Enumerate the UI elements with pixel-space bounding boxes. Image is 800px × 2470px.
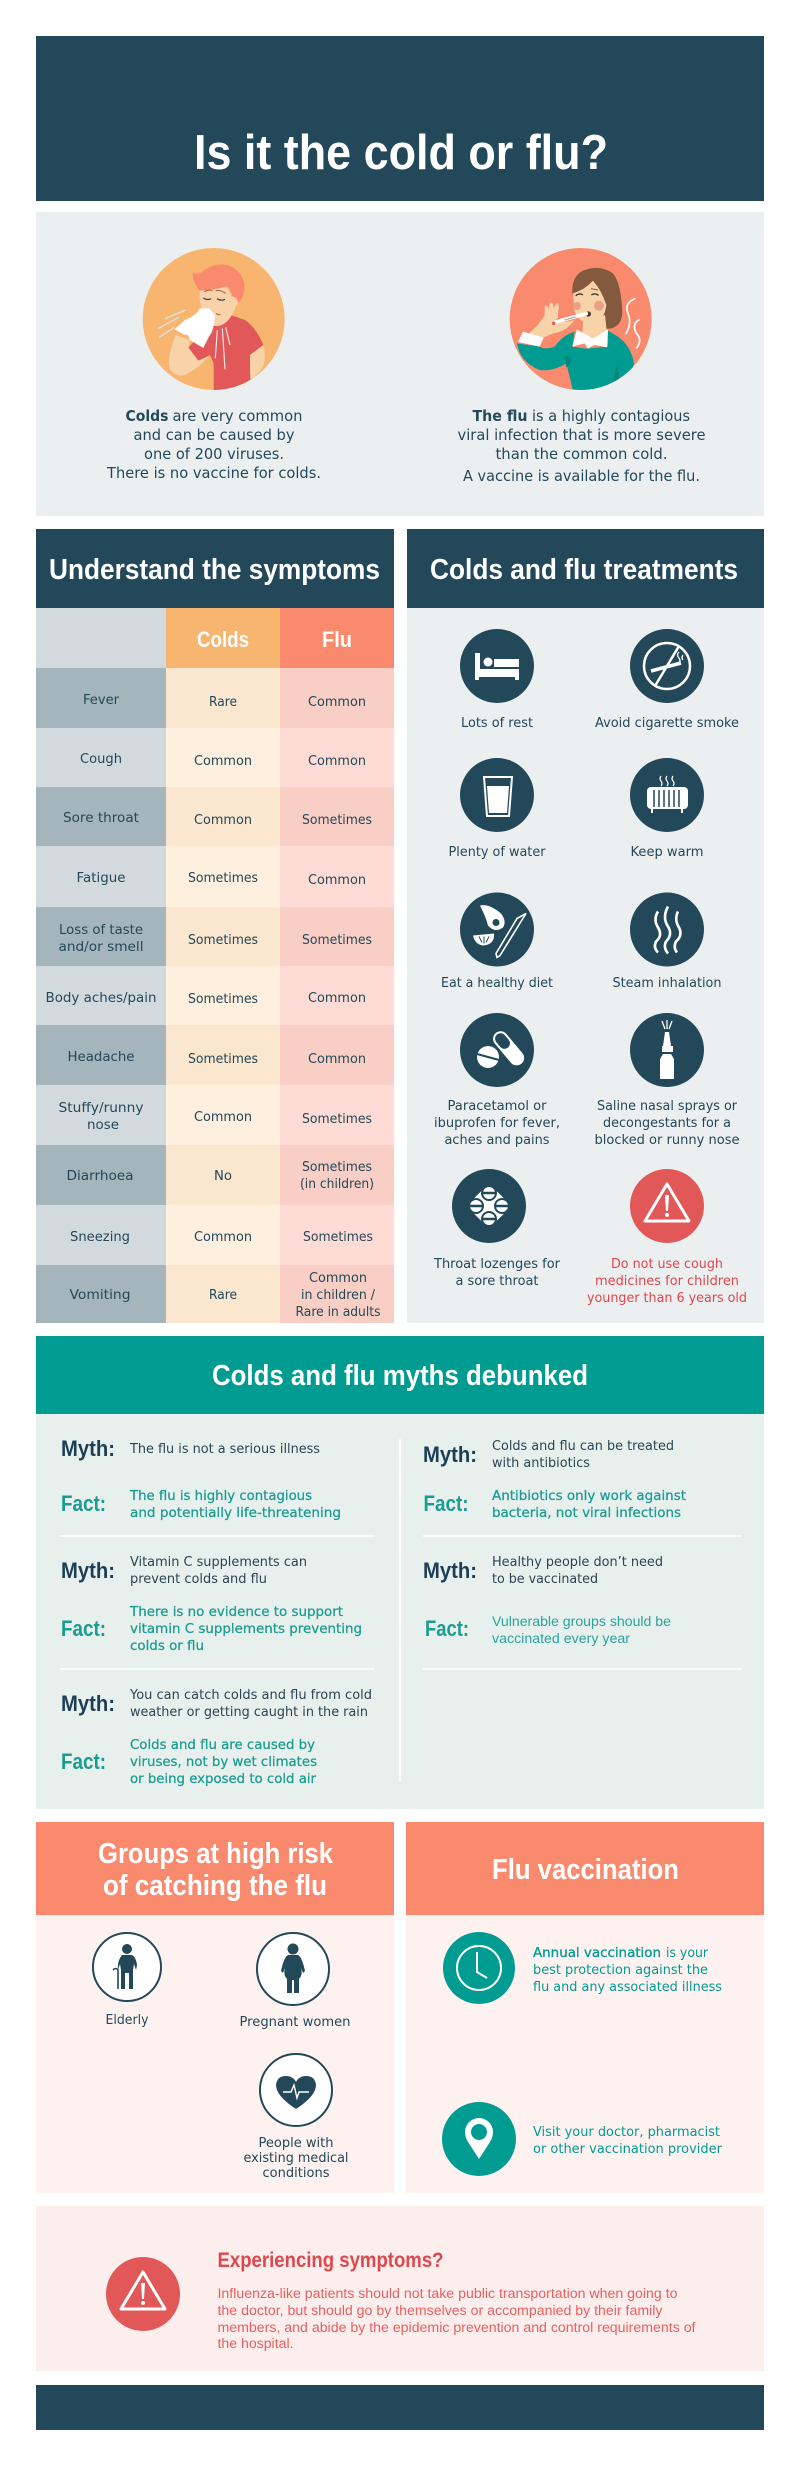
text: flu description: The flu [472, 407, 528, 425]
illustration: man sneezing [143, 248, 285, 391]
table row labels: Fever [83, 693, 120, 708]
title banner [36, 36, 764, 201]
myth 1: Myth: [61, 1436, 115, 1461]
heading: myths debunked: Colds and flu myths debunked [212, 1360, 588, 1392]
flu column values: Rare in adults [296, 1305, 381, 1320]
myth 4: Fact: [424, 1491, 468, 1516]
panel: high risk groups [36, 1822, 394, 2193]
flu column values: Common [308, 754, 366, 769]
text: annual vaccination: flu and any associated illness [533, 1980, 722, 1995]
warning text: cough medicines: medicines for children [595, 1274, 739, 1289]
icon: nasal spray [630, 1013, 704, 1087]
myth 5: Vulnerable groups should be [492, 1613, 671, 1629]
table row labels: Sneezing [70, 1230, 130, 1245]
callout heading: Experiencing symptoms? [218, 2249, 444, 2272]
icon: clock [443, 1932, 515, 2004]
flu column values: in children / [301, 1288, 376, 1303]
heading: colds and flu treatments: Colds and flu treatments [430, 554, 738, 586]
label: paracetamol or ibuprofen [434, 1099, 560, 1148]
myth 2: Vitamin C supplements can [130, 1555, 307, 1570]
table header row [36, 608, 394, 668]
myth 5: Healthy people don’t need [492, 1555, 663, 1570]
myth 3: weather or getting caught in the rain [130, 1705, 368, 1720]
title: Is it the cold or flu? [194, 126, 608, 180]
colds column values: Common [194, 754, 252, 769]
text: flu description: is a highly contagious [532, 407, 690, 425]
flu column values [296, 695, 381, 1320]
label: saline nasal sprays: decongestants for a [603, 1116, 731, 1131]
table header row: Flu [322, 627, 352, 652]
text: flu description: A vaccine is available for the flu. [463, 467, 700, 485]
label: throat lozenges [433, 1257, 561, 1289]
text: colds description: one of 200 viruses. [144, 445, 284, 463]
warning text: cough medicines: younger than 6 years old [587, 1291, 747, 1306]
label: existing medical conditions: conditions [262, 2166, 330, 2181]
text: visit your doctor [533, 2125, 723, 2157]
flu column values: Common [308, 695, 366, 710]
heading: flu vaccination: Flu vaccination [492, 1854, 679, 1886]
colds column values: Common [194, 1110, 252, 1125]
flu column values: Sometimes [302, 933, 372, 948]
label: paracetamol or ibuprofen: aches and pains [444, 1133, 550, 1148]
myth 5 [423, 1555, 671, 1646]
colds column values: Sometimes [188, 871, 258, 886]
myth 1: and potentially life-threatening [130, 1506, 341, 1521]
callout body text: the hospital. [218, 2336, 294, 2351]
heading: colds and flu treatments [407, 529, 764, 608]
panel: experiencing symptoms callout [36, 2206, 764, 2371]
label: elderly: Elderly [106, 2013, 149, 2028]
table row labels: Loss of taste [59, 923, 143, 938]
icon: throat lozenges [452, 1169, 526, 1243]
colds column values: Rare [209, 695, 237, 710]
table row labels: nose [87, 1118, 119, 1133]
label: paracetamol or ibuprofen: Paracetamol or [448, 1099, 547, 1114]
callout body text [218, 2286, 696, 2351]
colds column values: No [214, 1169, 232, 1184]
heading: myths debunked [36, 1336, 764, 1414]
table row labels: Fatigue [76, 871, 126, 886]
heading: understand the symptoms [36, 529, 394, 608]
flu column values: Common [308, 1052, 366, 1067]
text: annual vaccination: best protection against the [533, 1963, 708, 1978]
label: keep warm: Keep warm [630, 845, 704, 860]
flu column values: Sometimes [302, 1112, 372, 1127]
myth 2: Fact: [61, 1616, 106, 1641]
label: existing medical conditions: People with [258, 2136, 334, 2151]
text: colds description [106, 407, 321, 482]
icon: heart with pulse [260, 2054, 332, 2126]
flu column values: (in children) [300, 1177, 374, 1192]
text: annual vaccination: Annual vaccination [533, 1946, 661, 1961]
myth 5: to be vaccinated [492, 1572, 598, 1587]
warning text: cough medicines: Do not use cough [611, 1257, 723, 1272]
icon: pregnant woman [257, 1933, 329, 2005]
myth 2: vitamin C supplements preventing [130, 1622, 362, 1637]
myth 4: Antibiotics only work against [492, 1489, 686, 1504]
warning text: cough medicines [587, 1257, 747, 1306]
myth 3: or being exposed to cold air [130, 1772, 317, 1787]
text: colds description: and can be caused by [134, 426, 295, 444]
icon: glass of water [460, 758, 534, 832]
table row labels: Body aches/pain [46, 991, 156, 1006]
table row labels: Vomiting [70, 1288, 130, 1303]
callout body text: the doctor, but should go by themselves or accompanied by their family [218, 2303, 663, 2318]
icon: elderly [93, 1933, 161, 2001]
panel: myths debunked [36, 1336, 764, 1809]
icon: bed [460, 629, 534, 703]
label: saline nasal sprays: blocked or runny nose [594, 1133, 740, 1148]
text: flu description: than the common cold. [496, 445, 668, 463]
myth 3: You can catch colds and flu from cold [129, 1688, 372, 1703]
colds column values: Sometimes [188, 992, 258, 1007]
flu column values: Sometimes [303, 1230, 373, 1245]
label: steam inhalation: Steam inhalation [612, 976, 722, 991]
colds column values: Common [194, 1230, 252, 1245]
myth 3: Colds and flu are caused by [130, 1738, 315, 1753]
label: eat a healthy diet: Eat a healthy diet [441, 976, 553, 991]
label: avoid cigarette smoke: Avoid cigarette smoke [595, 716, 739, 731]
label: lots of rest: Lots of rest [461, 716, 533, 731]
myth 3: Fact: [61, 1749, 106, 1774]
label: saline nasal sprays: Saline nasal sprays or [597, 1099, 738, 1114]
icon: radiator [630, 758, 704, 832]
flu column values: Common [308, 873, 366, 888]
icon: warning [630, 1169, 704, 1243]
table rows background [36, 668, 394, 1323]
table row labels: Stuffy/runny [58, 1101, 144, 1116]
flu column values: Sometimes [302, 1160, 372, 1175]
panel: treatments [407, 529, 764, 1323]
myth 4: bacteria, not viral infections [492, 1506, 681, 1521]
myth 5: Myth: [423, 1558, 477, 1583]
callout body text: members, and abide by the epidemic prevention and control requirements of [218, 2320, 696, 2335]
myth 2: colds or flu [130, 1639, 204, 1654]
heading: flu vaccination [406, 1822, 764, 1915]
heading: groups at high risk [36, 1822, 394, 1915]
text: flu description: viral infection that is more severe [458, 426, 706, 444]
icon: steam [630, 892, 704, 966]
myth 1: The flu is not a serious illness [129, 1442, 320, 1457]
myth 4: Myth: [423, 1442, 477, 1467]
colds column values [188, 695, 258, 1303]
myth 3: Myth: [61, 1691, 115, 1716]
table header row: Colds [197, 627, 249, 652]
text: colds description: There is no vaccine for colds. [106, 464, 321, 482]
icon: warning [106, 2257, 180, 2331]
panel: flu vaccination [406, 1822, 764, 2193]
flu column values: Sometimes [302, 813, 372, 828]
text: flu description [458, 407, 706, 485]
myth 4: with antibiotics [492, 1456, 590, 1471]
label: pregnant women: Pregnant women [240, 2015, 350, 2030]
colds column values: Common [194, 813, 252, 828]
label: throat lozenges: Throat lozenges for [433, 1257, 561, 1272]
myth 3: viruses, not by wet climates [130, 1755, 317, 1770]
flu column values: Common [308, 991, 366, 1006]
text: visit your doctor: Visit your doctor, pharmacist [533, 2125, 720, 2140]
myth 2 [61, 1555, 362, 1654]
myth 4 [423, 1439, 686, 1521]
label: saline nasal sprays [594, 1099, 740, 1148]
icon: location pin [442, 2102, 516, 2176]
myth 2: There is no evidence to support [129, 1605, 343, 1620]
panel: symptoms table [36, 529, 394, 1323]
myth 1 [61, 1436, 341, 1521]
colds column values: Rare [209, 1288, 237, 1303]
heading: understand the symptoms: Understand the symptoms [49, 554, 380, 586]
callout body text: Influenza-like patients should not take public transportation when going to [218, 2286, 678, 2301]
flu column values: Common [309, 1271, 367, 1286]
myth 3 [61, 1688, 372, 1787]
label: plenty of water: Plenty of water [448, 845, 546, 860]
heading: groups at high risk: of catching the flu [103, 1870, 327, 1902]
footer bar [36, 2385, 764, 2430]
label: existing medical conditions [244, 2136, 348, 2181]
table row labels: Sore throat [63, 811, 139, 826]
myth 2: Myth: [61, 1558, 115, 1583]
myth 5: Fact: [425, 1616, 469, 1641]
table row labels: Diarrhoea [66, 1169, 134, 1184]
text: colds description: Colds [126, 407, 169, 425]
text: annual vaccination [533, 1946, 722, 1995]
myth 4: Colds and flu can be treated [492, 1439, 674, 1454]
label: throat lozenges: a sore throat [456, 1274, 538, 1289]
label: existing medical conditions: existing medical [244, 2151, 348, 2166]
text: visit your doctor: or other vaccination provider [533, 2142, 723, 2157]
icon: no smoking [630, 629, 704, 703]
colds column values: Sometimes [188, 1052, 258, 1067]
text: annual vaccination: is your [666, 1946, 709, 1961]
colds column values: Sometimes [188, 933, 258, 948]
panel: cold vs flu intro [36, 212, 764, 516]
table row labels: and/or smell [58, 940, 144, 955]
table row labels [46, 693, 156, 1303]
icon: healthy food [460, 892, 534, 966]
icon: pills [460, 1013, 534, 1087]
myth 5: vaccinated every year [492, 1630, 630, 1646]
text: colds description: are very common [172, 407, 302, 425]
myth 2: prevent colds and flu [130, 1572, 267, 1587]
heading: groups at high risk: Groups at high risk [98, 1838, 334, 1870]
myth 1: Fact: [61, 1491, 106, 1516]
illustration: woman with thermometer [510, 248, 652, 391]
table row labels: Cough [80, 752, 122, 767]
label: paracetamol or ibuprofen: ibuprofen for fever, [434, 1116, 560, 1131]
myth 1: The flu is highly contagious [129, 1489, 312, 1504]
table row labels: Headache [68, 1050, 135, 1065]
